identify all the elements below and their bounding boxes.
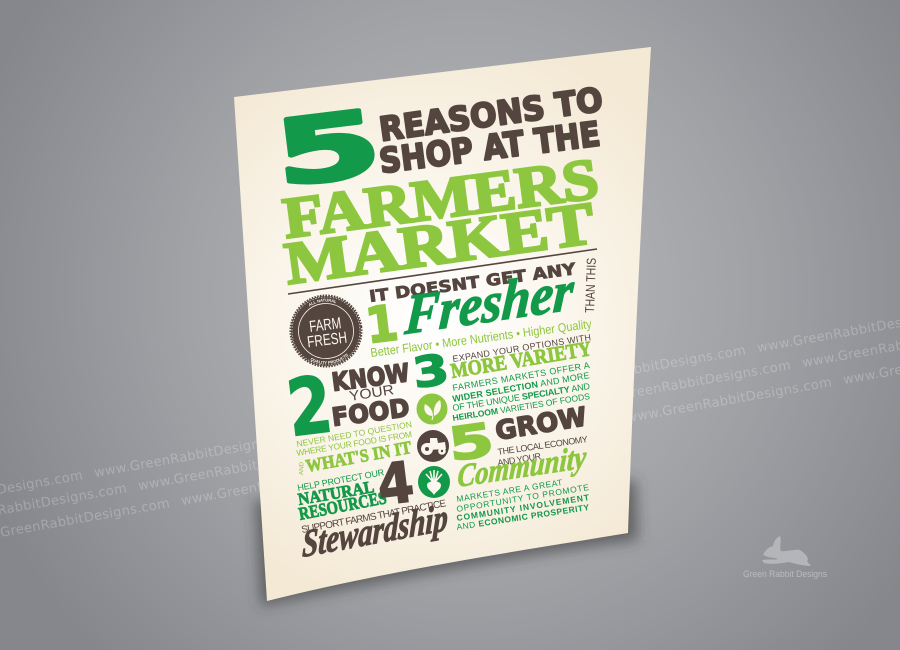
icon: rabbit: [762, 536, 811, 566]
script word: community: Community: [457, 438, 588, 494]
heading: market: MARKET: [281, 190, 598, 297]
benefits line: Better Flavor • More Nutrients • Higher Quality: [370, 317, 593, 360]
watermark: right: [539, 305, 900, 426]
natural: NATURAL: [296, 477, 376, 509]
reason 4: stewardship: [296, 450, 448, 566]
logo wordmark: Green Rabbit Designs: [743, 569, 827, 580]
body line 4: HEIRLOOM VARIETIES OF FOODS: [452, 391, 591, 423]
number 4: 4: [374, 450, 417, 519]
body line 3: COMMUNITY INVOLVEMENT: [456, 492, 590, 523]
icon: tractor: [417, 430, 449, 462]
badge: farm fresh: FRESH: [306, 330, 348, 351]
icon: beet: [418, 466, 450, 498]
the local economy: THE LOCAL ECONOMY: [497, 434, 588, 457]
body line 3: OF THE UNIQUE SPECIALTY AND: [452, 381, 591, 413]
icon: leaf: [416, 394, 448, 424]
more variety: MORE VARIETY: [449, 336, 593, 383]
watermark: right: www.GreenRabbitDesigns.com: [539, 343, 747, 394]
reason 1 lead-in: IT DOESNT GET ANY: [368, 259, 577, 306]
watermark: left: www.GreenRabbitDesigns.com: [137, 443, 345, 494]
watermark: left: [0, 430, 388, 547]
food: FOOD: [330, 393, 411, 432]
watermark: left: www.GreenRabbitDesigns.com: [180, 458, 388, 509]
badge: farm fresh: ALL NATURAL: [309, 298, 336, 306]
script word: stewardship: Stewardship: [302, 497, 448, 566]
heading: shop at the: SHOP AT THE: [377, 114, 602, 182]
body line 1: MARKETS ARE A GREAT: [456, 477, 563, 504]
body line 1: FARMERS MARKETS OFFER A: [452, 360, 590, 393]
body line 2: WHERE YOUR FOOD IS FROM: [296, 429, 413, 458]
and your: AND YOUR: [497, 451, 542, 468]
reason 2: know your food: [282, 358, 413, 476]
heading: farmers: FARMERS: [279, 146, 602, 251]
title block: [269, 80, 605, 297]
divider rule: [288, 249, 597, 294]
badge: farm fresh: FARM: [308, 315, 342, 336]
resources: RESOURCES: [297, 487, 388, 524]
watermark: left: www.GreenRabbitDesigns.com: [93, 430, 301, 481]
reason 1: fresher: [363, 257, 599, 360]
vertical and: AND: [299, 461, 305, 475]
watermark: right: www.GreenRabbitDesigns.com: [625, 375, 833, 426]
support line: SUPPORT FARMS THAT PRACTICE: [301, 498, 447, 536]
script word: fresher: Fresher: [402, 260, 576, 347]
poster sheet: [234, 47, 651, 601]
grow: GROW: [493, 402, 589, 447]
poster shadow: [255, 480, 638, 606]
what's in it: WHAT'S IN IT: [304, 437, 413, 476]
badge: farm fresh: QUALITY PRODUCTS: [310, 354, 348, 364]
number 5: 5: [445, 412, 497, 472]
big number 5: 5: [269, 91, 387, 208]
number 1: 1: [363, 294, 401, 355]
reason 5: community: [445, 402, 590, 532]
logo: green rabbit designs: [743, 536, 827, 580]
lead-in: EXPAND YOUR OPTIONS WITH: [452, 332, 592, 364]
number 2: 2: [282, 360, 337, 455]
body line 4: AND ECONOMIC PROSPERITY: [456, 502, 590, 532]
lead-in: HELP PROTECT OUR: [297, 467, 385, 493]
watermark: right: www.GreenRabbitDesigns.com: [584, 358, 792, 409]
heading: reasons to: REASONS TO: [377, 80, 605, 149]
your: YOUR: [348, 381, 395, 404]
badge: farm fresh: [290, 294, 362, 368]
reason 3: more variety: [410, 332, 593, 423]
know: KNOW: [330, 358, 411, 397]
number 3: 3: [410, 344, 452, 398]
body line 2: WIDER SELECTION AND MORE: [452, 370, 590, 404]
vertical text: than this: THAN THIS: [582, 257, 599, 313]
body line 1: NEVER NEED TO QUESTION: [296, 419, 413, 449]
body line 2: OPPORTUNITY TO PROMOTE: [456, 482, 590, 514]
